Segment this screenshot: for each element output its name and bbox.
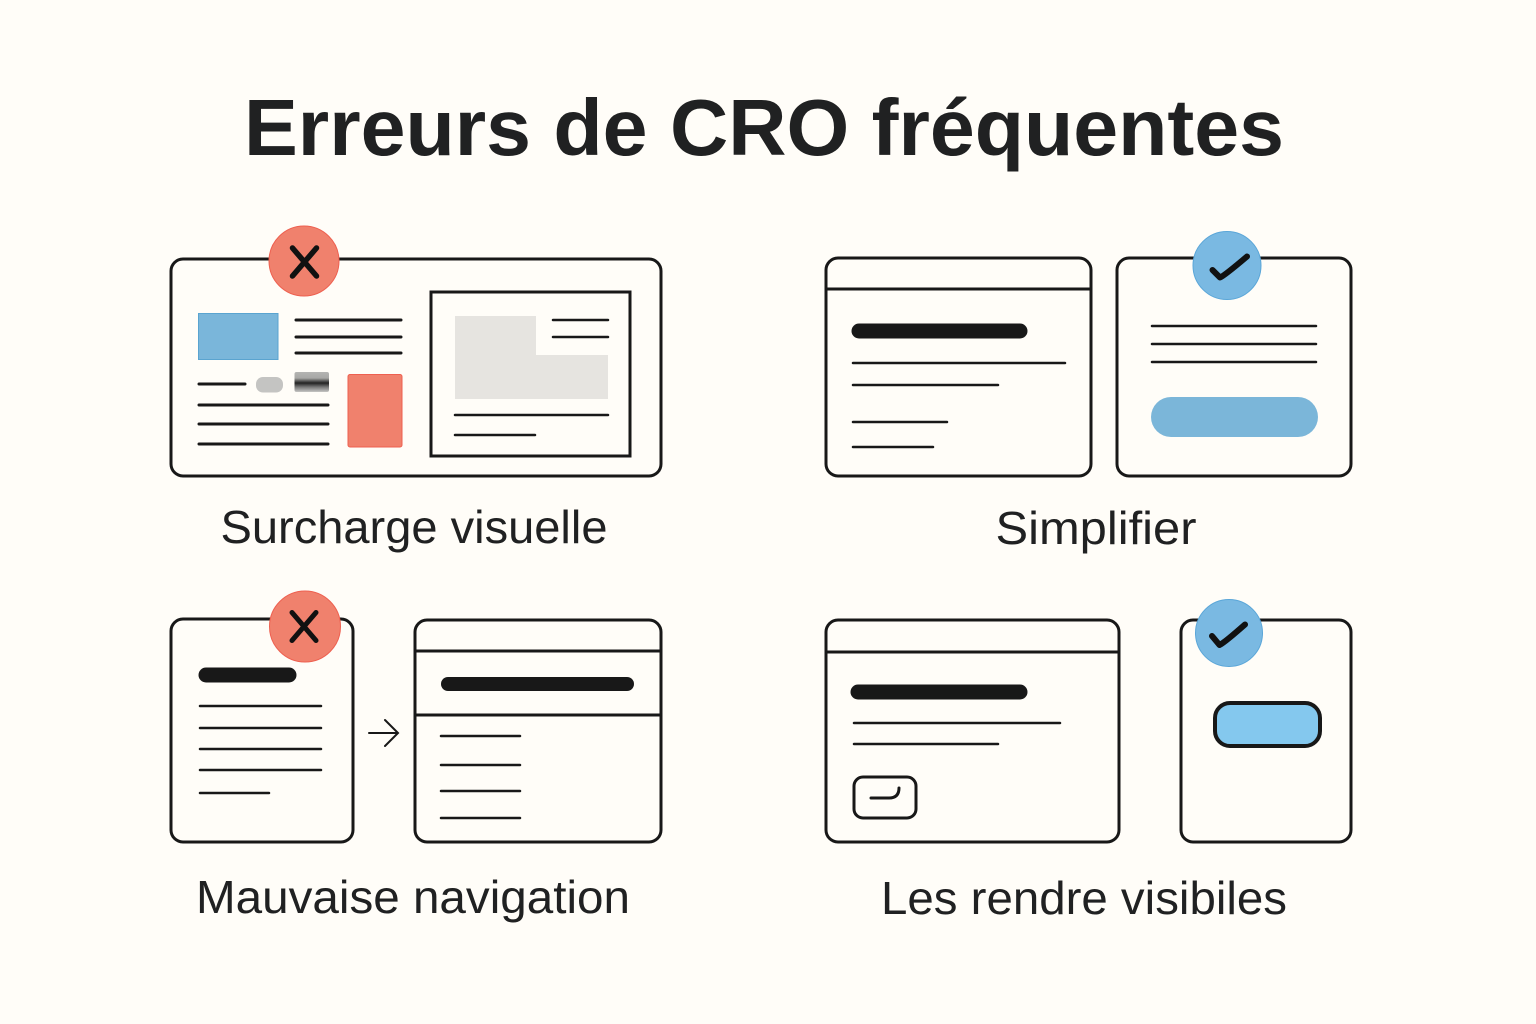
panel: les rendre visibles [826,620,1351,842]
label: mauvaise navigation: Mauvaise navigation [196,871,630,923]
right card [1181,620,1351,842]
right card [1117,258,1351,476]
blue image block [198,314,278,360]
title: Erreurs de CRO fréquentes [244,83,1284,172]
inner frame [431,292,630,456]
icon: blue check 1 [1193,232,1261,300]
left window [826,620,1119,842]
icon: blue check 2 [1196,600,1262,666]
label: les rendre visibiles: Les rendre visibiles [881,872,1287,924]
icon: red cross 2 [270,591,340,662]
label: simplifier: Simplifier [996,502,1196,554]
panel: mauvaise navigation [171,619,661,842]
text lines top [296,320,401,353]
label: surcharge visuelle: Surcharge visuelle [220,501,608,553]
text lines bottom [199,405,328,444]
arrow [369,720,398,746]
small line and pill row [199,372,329,392]
red block [348,374,402,447]
panel: surcharge visuelle [171,259,661,476]
left page [171,619,353,842]
panel: simplifier [826,258,1351,476]
icon: red cross 1 [269,226,339,296]
right window [415,620,661,842]
left window [826,258,1091,476]
